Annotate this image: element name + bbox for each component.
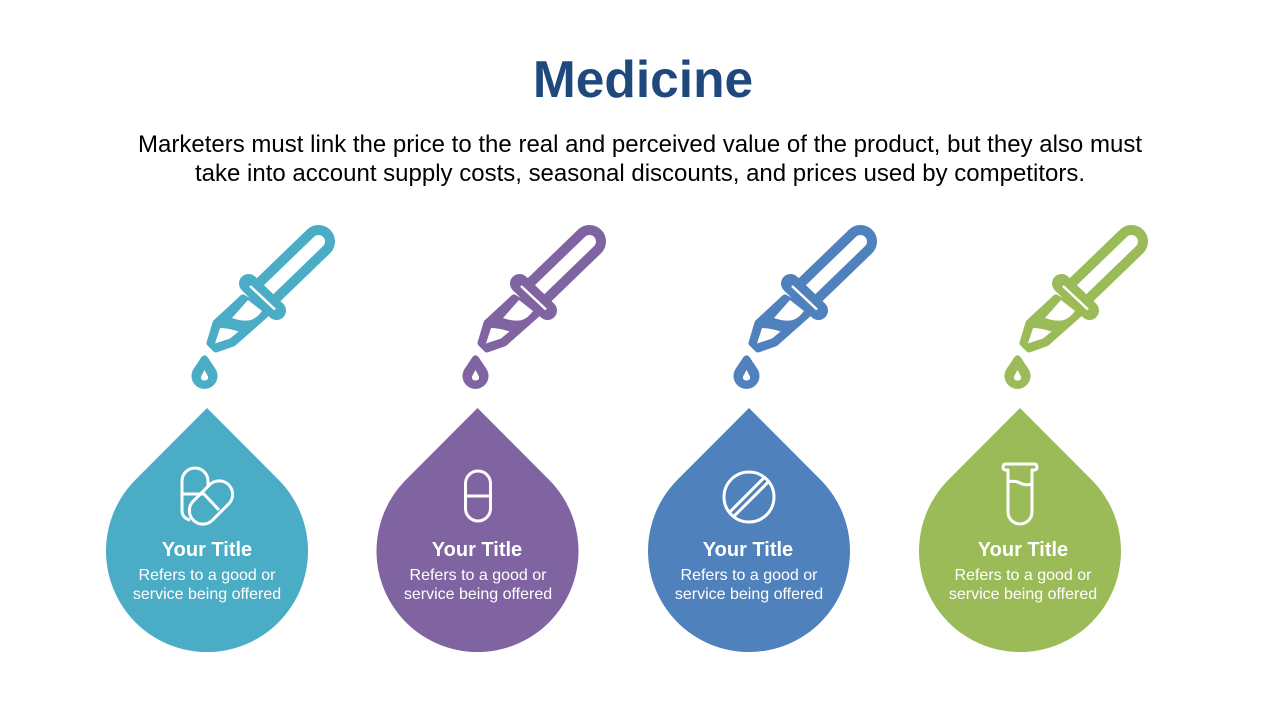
icon: purple dropper [462,225,606,389]
heading: Your Title [978,539,1068,561]
icon: tablet [724,472,774,522]
panel: green drop [919,408,1121,652]
text block [404,567,552,603]
heading: Your Title [432,539,522,561]
text block: service being offered [133,586,281,603]
text block: Refers to a good or [955,567,1092,584]
text block: service being offered [675,586,823,603]
text block: service being offered [404,586,552,603]
text block [949,567,1097,603]
description text: Marketers must link the price to the real and perceived value of the product, but they also must [138,131,1142,158]
panel: purple drop [377,408,578,652]
icon: blue dropper [734,225,877,389]
icon: green dropper [1004,225,1148,389]
text block [675,567,823,603]
icon: capsules [182,468,238,530]
text block: service being offered [949,586,1097,603]
description text [138,131,1142,187]
description text: take into account supply costs, seasonal discounts, and prices used by competitors. [195,160,1085,187]
panel: teal drop [106,408,308,652]
icon: test tube [1003,464,1037,524]
text block: Refers to a good or [681,567,818,584]
heading: Your Title [162,539,252,561]
icon: teal dropper [192,225,335,389]
panel: blue drop [648,408,850,652]
icon: pill [466,471,490,521]
text block [133,567,281,603]
heading: Your Title [703,539,793,561]
text block: Refers to a good or [410,567,547,584]
title: Medicine [533,50,753,108]
text block: Refers to a good or [139,567,276,584]
